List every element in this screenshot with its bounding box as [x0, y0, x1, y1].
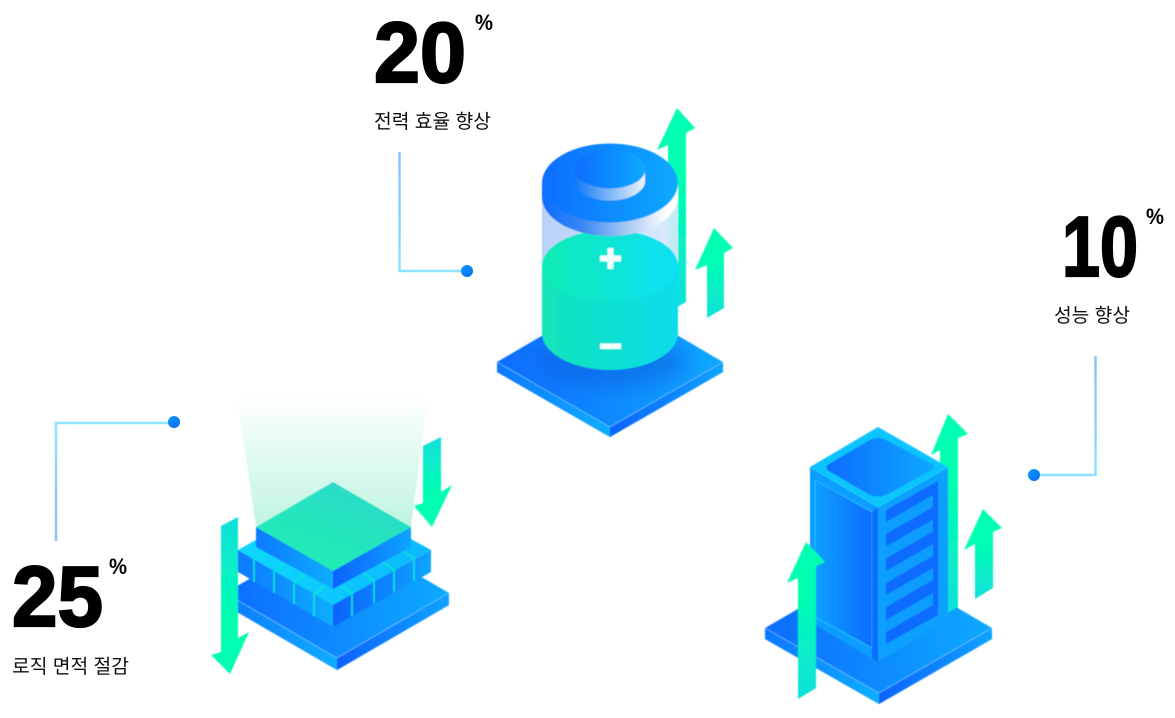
percent sign: % [109, 554, 127, 579]
label: 성능 향상 [1054, 305, 1130, 327]
label: 전력 효율 향상 [374, 111, 491, 133]
illustration: server [765, 414, 1002, 704]
top recess [826, 438, 935, 496]
top layer [256, 482, 411, 589]
leader line: battery [400, 152, 473, 277]
arrow: small up [695, 228, 733, 318]
leader line: server [1028, 356, 1096, 481]
server tower [810, 427, 948, 662]
arrow: short down [414, 437, 452, 527]
base plate [225, 528, 449, 670]
arrow: long down [211, 517, 249, 674]
illustration: battery [497, 108, 733, 437]
minus sign [600, 344, 621, 349]
stat: 10% performance [1054, 200, 1164, 327]
number 10: 10 [1062, 200, 1138, 295]
middle layer [238, 496, 431, 627]
percent sign: % [475, 10, 493, 35]
plus sign [600, 248, 621, 269]
number 20: 20 [374, 6, 466, 101]
leader line: chip [56, 416, 180, 541]
arrow: front up [787, 542, 825, 699]
teal circuit lines [254, 551, 414, 616]
battery fluid [542, 230, 678, 370]
illustration: chip [211, 395, 452, 674]
arrow: large up behind tower [931, 414, 968, 617]
left door panel [815, 480, 872, 648]
light beam [237, 395, 428, 571]
vent bars [886, 481, 938, 644]
number 25: 25 [12, 550, 103, 645]
battery cap [574, 150, 646, 201]
base plate [497, 296, 723, 437]
arrow: large up behind battery [657, 108, 695, 312]
arrow: small up [964, 509, 1002, 599]
label: 로직 면적 절감 [12, 656, 129, 678]
stat: 25% logic area [12, 550, 129, 678]
glass body [542, 183, 678, 300]
base plate [765, 562, 992, 704]
stat: 20% power efficiency [374, 6, 493, 133]
percent sign: % [1146, 204, 1164, 229]
battery lid [542, 144, 678, 236]
